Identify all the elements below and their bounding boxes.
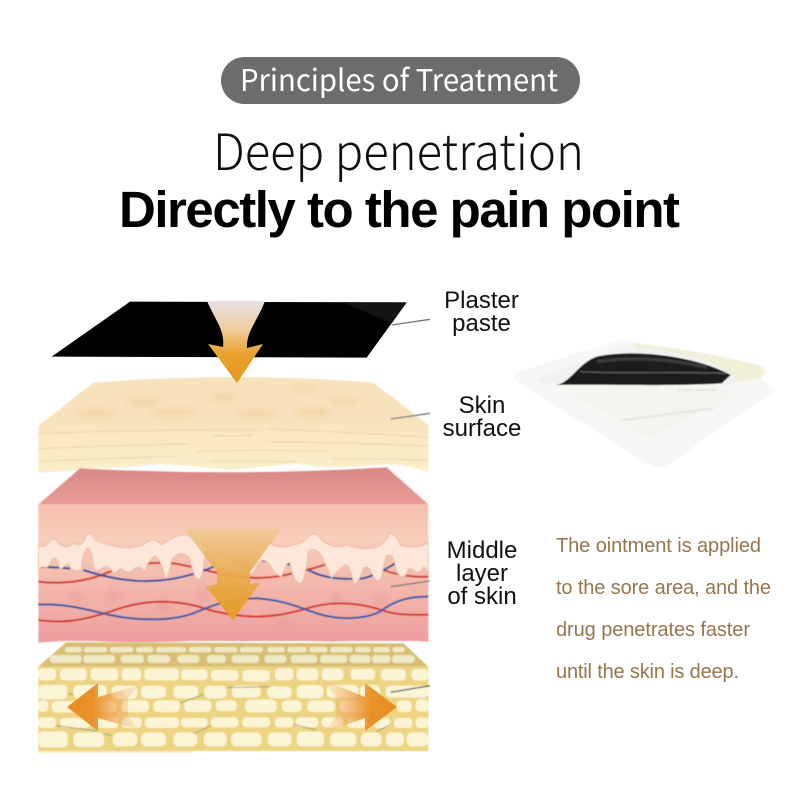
badge: Principles of Treatment: Principles of Treatment [240,56,558,100]
connective fibres [57,687,390,736]
description text: until the skin is deep. [556,661,739,683]
deep blood vessels [38,597,428,622]
patch backing sheet [513,339,775,467]
epidermis ridges [38,533,428,583]
title line: Directly to the pain point: Directly to the pain point [119,181,680,238]
description text: The ointment is applied [556,535,761,557]
label: Plaster paste: Plaster [444,287,519,314]
black adhesive [557,353,731,385]
description text: to the sore area, and the [556,577,771,599]
label: Middle layer of skin: of skin [447,583,517,610]
cells [38,668,428,747]
product photo: peeled plaster patch [513,339,775,467]
label: Plaster paste: paste [452,310,511,337]
arrow: through middle skin layer [184,529,281,620]
arrow: spreading right [323,680,397,733]
illustration: skin surface layer [38,377,430,473]
title line: Deep penetration: Deep penetration [213,113,584,185]
label: Middle layer of skin: Middle [447,537,517,564]
illustration: middle layer of skin [38,467,430,643]
leader line: plaster [392,319,430,325]
leader line: middle layer [391,581,430,587]
label: Middle layer of skin: layer [456,560,508,587]
leader line: skin surface [391,413,430,419]
arrow: spreading left [67,683,140,731]
illustration: fat layer [38,642,430,753]
illustration: plaster paste layer [52,302,430,358]
description text: drug penetrates faster [556,619,750,641]
leader line: fat layer [391,686,430,692]
label: Skin surface: surface [443,415,521,442]
label: Skin surface: Skin [459,392,505,419]
upper blood vessels [38,560,428,583]
arrow: through plaster [207,301,265,383]
